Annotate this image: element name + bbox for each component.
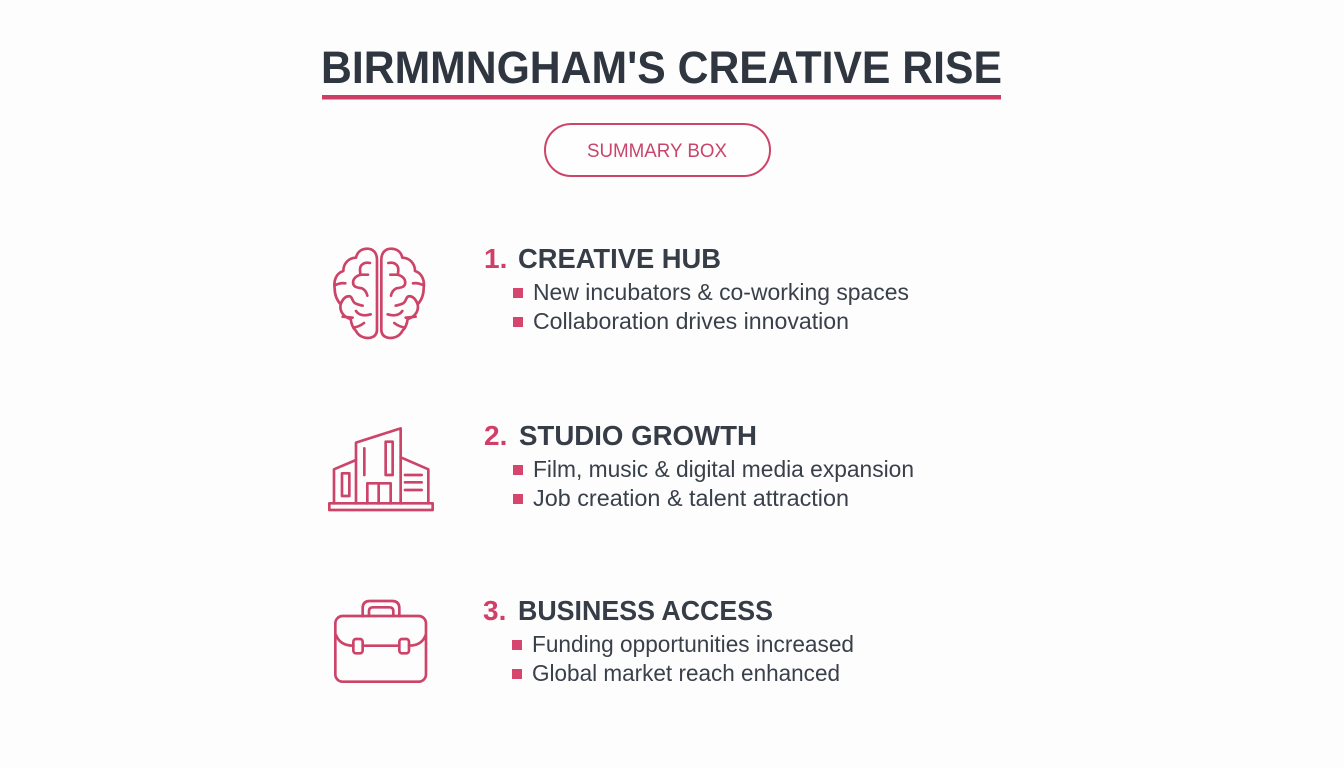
icon: studio building [329, 428, 433, 510]
summary box pill: SUMMARY BOX [587, 140, 727, 162]
icon: briefcase [335, 601, 426, 682]
heading: 2. [484, 420, 507, 451]
heading: 3. [483, 595, 506, 626]
title: BIRMMNGHAM'S CREATIVE RISE [321, 42, 1002, 93]
title underline [322, 95, 1001, 100]
bullet 2: Global market reach enhanced [532, 660, 840, 686]
section 1: creative hub: CREATIVE HUB [518, 243, 721, 274]
icon: brain [334, 249, 424, 338]
bullet 1: New incubators & co-working spaces [533, 279, 909, 305]
heading: 1. [484, 243, 507, 274]
section 3: business access: BUSINESS ACCESS [518, 595, 773, 626]
section 3: business access [335, 595, 854, 686]
section 2: studio growth [329, 420, 914, 511]
section 2: studio growth: STUDIO GROWTH [519, 420, 757, 451]
bullet 2: Collaboration drives innovation [533, 308, 849, 334]
bullet 2: Job creation & talent attraction [533, 485, 849, 511]
bullet 1: Film, music & digital media expansion [533, 456, 914, 482]
section 1: creative hub [334, 243, 909, 338]
summary box pill [545, 124, 770, 176]
bullet 1: Funding opportunities increased [532, 631, 854, 657]
